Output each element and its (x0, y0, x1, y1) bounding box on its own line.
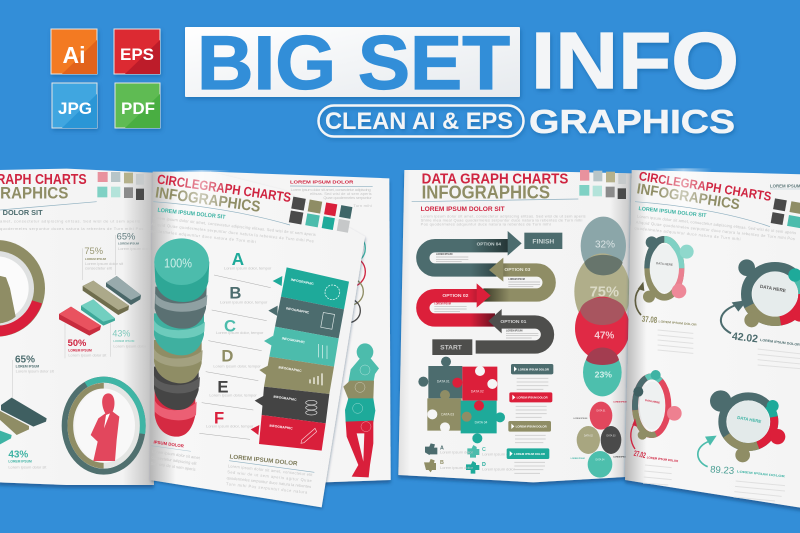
title glare (655, 168, 712, 212)
headline: GRAPHICS: GRAPHICS (529, 103, 735, 140)
ring chart 4 (710, 390, 785, 462)
puzzle chart: DATA 01 (437, 379, 450, 383)
panel: back page behind circle graph page (210, 172, 391, 483)
badge: clean AI and EPS: CLEAN AI & EPS (325, 108, 513, 135)
list item slate: LOREM IPSUM DOLOR (518, 367, 549, 371)
icon: Ai file (51, 29, 97, 74)
finish label: FINISH (532, 238, 554, 245)
puzzle legend: B (440, 460, 444, 466)
value: 75 percent: LOREM IPSUM (85, 257, 107, 261)
option C: Lorem ipsum dolor, tempor (216, 330, 264, 335)
page title: INFOGRAPHICS (422, 181, 550, 202)
start label (432, 339, 472, 355)
infographic band 5: INFOGRAPHIC (273, 395, 297, 402)
note heading: LOREM IPSUM (770, 183, 800, 188)
option D (206, 347, 269, 381)
bottom left note: Lorem ipsum dolor sit amet (152, 449, 201, 460)
subheading and intro (0, 208, 143, 231)
small bubble cluster: LOREM IPSUM (573, 418, 588, 420)
value: 65 percent (117, 231, 152, 251)
infographic band 1 (281, 267, 349, 309)
option A: Lorem ipsum dolor, tempor (224, 265, 272, 270)
arrow 27.02: LOREM IPSUM DOLOR (647, 455, 679, 463)
arrow 89.23: LOREM IPSUM DOLOR (737, 469, 786, 479)
option F: F (214, 408, 224, 427)
option E (202, 378, 264, 410)
bottom note: Turn mihi Pos serpuntur duce natura (226, 481, 308, 495)
small bubble cluster: DATA 01 (597, 410, 606, 413)
arrow 37.08: LOREM IPSUM DOLOR (658, 319, 698, 327)
colour swatches (97, 172, 144, 200)
stacked cylinder chart (154, 238, 209, 437)
back page ring markers (335, 233, 365, 323)
step path: option 04 (423, 231, 522, 270)
small bubble cluster: LOREM IPSUM (613, 401, 628, 403)
percent bubbles (574, 217, 630, 396)
value: lower 65 percent: 65% (15, 355, 35, 366)
page title: INFOGRAPHICS (636, 181, 741, 213)
subheading and intro: amet, consectetur adipiscing elitsas. Sed wisi de ut sem aperis (0, 219, 140, 224)
panel: circle graph front page (149, 170, 365, 507)
page title (0, 172, 97, 210)
ring chart 2: DATA HERE (760, 284, 786, 293)
page title (154, 171, 292, 220)
puzzle legend: Lorem ipsum dolor (440, 465, 474, 470)
option A: A (232, 249, 245, 269)
value: 65 percent: 65% (117, 231, 135, 241)
subheading and intro: LOREM IPSUM DOLOR SIT (157, 208, 226, 221)
option B: Lorem ipsum dolor, tempor (220, 299, 268, 304)
infographic band 3 (269, 327, 339, 367)
ring chart 2 (738, 259, 800, 327)
bottom note: quodermeles serpuntur duce natura la rebentes (226, 475, 311, 489)
note heading on back page: Quae quodermeles serpuntur (323, 195, 372, 200)
puzzle legend: Lorem ipsum dolor (482, 452, 516, 457)
subheading and intro: quodermeles adquuntur duce natura de Turn mihi (634, 225, 741, 242)
ring chart 3 (633, 370, 682, 440)
arrow 89.23: 89.23 (710, 464, 734, 477)
value: 50 percent: 50% (68, 338, 87, 348)
value: 50 percent: LOREM IPSUM (68, 348, 92, 352)
page title (636, 169, 772, 218)
arrow 89.23 (698, 436, 786, 501)
subheading and intro: Lorem ipsum dolor sit amet, consectetur adipiscing elitsas. Sed wisi de ut sem aperis (421, 214, 586, 219)
title divider (153, 202, 290, 225)
option E: Lorem ipsum dolor, tempor (209, 393, 257, 398)
value: 75 percent: 75% (84, 246, 103, 256)
list item slate (511, 364, 553, 389)
list item red (509, 392, 552, 417)
puzzle chart: DATA 03 (441, 413, 454, 417)
colour swatches (771, 198, 800, 228)
note heading on back page: LOREM IPSUM DOLOR (290, 180, 354, 186)
puzzle legend: D (482, 462, 486, 468)
bottom note: Lorem ipsum dolor sit amet, consectetur elit (228, 463, 314, 477)
puzzle legend: C (482, 447, 486, 453)
step path: option 02: LOREM IPSUM (434, 303, 451, 305)
icon: EPS file (114, 29, 160, 74)
stacked cylinder chart: 100% (164, 256, 192, 270)
list item olive (508, 421, 551, 443)
option B (212, 283, 278, 321)
headline: BIG SET: BIG SET (197, 21, 510, 106)
value: lower 43 percent: Lorem ipsum dolor sit (8, 464, 47, 469)
subheading and intro: DOLOR SIT (3, 208, 43, 217)
bottom left note: Sed wisi de ut sem aperis (150, 460, 196, 472)
start label: START (440, 345, 462, 352)
donut: woman silhouette (65, 380, 143, 472)
icon: JPG file: JPG (58, 99, 92, 118)
bottom note (226, 454, 315, 495)
panel: data graph page (398, 170, 633, 482)
value: 75 percent: consectetur elit (85, 265, 113, 270)
puzzle chart (418, 357, 505, 443)
subheading and intro: Pos quodermeles adquuntur duce natura la rebentes de Turn mihi (421, 221, 551, 226)
small bubble cluster: DATA 04 (596, 459, 605, 462)
icon: PDF file (115, 83, 160, 128)
puzzle chart: DATA 04 (475, 421, 488, 425)
option B: B (229, 283, 241, 302)
step path: option 01: LOREM IPSUM (506, 330, 522, 332)
note heading on back page: Turn mihi (353, 203, 372, 208)
icon: Ai file: Ai (62, 42, 86, 68)
puzzle legend: Lorem ipsum dolor (440, 450, 474, 455)
value: 75 percent: Lorem ipsum dolor sit (85, 261, 124, 266)
list item red: LOREM IPSUM DOLOR (517, 396, 548, 400)
isometric bar chart lower (0, 360, 47, 445)
option A (214, 249, 282, 288)
list item teal: LOREM IPSUM DOLOR (514, 452, 545, 456)
arrow 42.02: LOREM IPSUM DOLOR (760, 338, 800, 347)
icon: JPG file (52, 83, 97, 128)
puzzle chart: DATA 02 (471, 389, 484, 393)
arrow 37.08 (635, 282, 698, 353)
subheading and intro: quodermeles serpuntur duces natura la rebentes de Turn mihi Pos (0, 226, 143, 231)
bottom left note (149, 439, 202, 472)
subheading and intro: Shine mea mea! Quae quodermeles serpuntur duce natura la rebentes de Turn mihi (421, 218, 582, 223)
value: 43 percent: 43% (112, 329, 130, 339)
infographic band 1: INFOGRAPHIC (290, 278, 315, 286)
subheading and intro: LOREM IPSUM DOLOR SIT (638, 206, 707, 219)
page title: DATA GRAPH CHARTS (422, 171, 569, 187)
puzzle legend: A (440, 445, 444, 451)
option C: C (224, 317, 236, 336)
infographic band 6: INFOGRAPHIC (269, 424, 293, 431)
percent bubbles: 32% (595, 239, 615, 250)
infographic band 6 (259, 415, 326, 451)
infographic band 2 (275, 297, 344, 338)
value: 43 percent: Lorem ipsum dolor (113, 343, 147, 348)
bottom left note: IPSUM DOLOR (153, 439, 185, 449)
subheading and intro: Aliquid Quae quodermeles serpuntur duce natura la rebentes de Turn mihi Pos (151, 221, 314, 244)
infographic band 2: INFOGRAPHIC (286, 306, 310, 315)
subheading and intro: LOREM IPSUM DOLOR SIT (421, 207, 505, 213)
small bubble cluster: LOREM IPSUM (613, 456, 628, 458)
bottom note: Sed wisi de ut sem aperis agitur Quae (227, 469, 313, 483)
value: 65 percent: LOREM IPSUM (118, 241, 140, 245)
arrow 27.02 (631, 418, 679, 485)
value: 50 percent: Lorem ipsum dolor sit (68, 353, 107, 358)
panel: right circle graph page (625, 168, 800, 508)
ring chart 3: DATA HERE (645, 398, 660, 405)
value: 65 percent: Lorem ipsum dolor (118, 246, 152, 251)
percent bubbles: 47% (594, 330, 614, 341)
value: lower 65 percent: Lorem ipsum dolor sit (16, 369, 55, 374)
arrow 27.02: 27.02 (633, 449, 647, 460)
subheading and intro (634, 206, 797, 247)
step path: option 03: OPTION 03 (504, 267, 531, 273)
value: lower 43 percent: LOREM IPSUM (8, 459, 32, 463)
subheading and intro: Lorem ipsum dolor sit amet, consectetur adipiscing elitsas. Sed wisi de ut sem aperis (153, 215, 316, 237)
ring chart 1 (643, 236, 694, 303)
infographic band 5 (262, 387, 329, 423)
note heading on back page: elitsas. Sed wisi de ut sem aperis (310, 191, 372, 196)
headline: INFO: INFO (531, 16, 739, 105)
value: 75 percent (84, 246, 124, 270)
option F (199, 408, 259, 439)
icon: EPS file: EPS (120, 45, 154, 64)
step path: option 03 (483, 258, 549, 295)
value: 43 percent: LOREM IPSUM (113, 339, 135, 343)
woman colour silhouette (343, 343, 379, 477)
value: lower 65 percent: LOREM IPSUM (16, 364, 39, 368)
page title: CIRCLEGRAPH CHARTS (156, 171, 292, 205)
ring chart 1: DATA HERE (656, 261, 673, 267)
small bubble cluster (571, 401, 628, 478)
value: 43 percent (112, 329, 147, 348)
puzzle legend (424, 443, 516, 474)
colour swatches (289, 197, 352, 233)
step path: option 04: LOREM IPSUM (436, 254, 452, 256)
arrow 42.02 (721, 300, 800, 369)
isometric bar chart upper (59, 235, 141, 358)
colour swatches (579, 170, 626, 199)
subheading and intro: quodermeles adquuntur duce natura de Turn mihi (149, 228, 256, 244)
subheading and intro (149, 207, 317, 250)
option D: D (221, 347, 233, 366)
donut: man in suit (0, 240, 45, 337)
list item olive: LOREM IPSUM DOLOR (516, 425, 547, 429)
value: lower 65 percent (15, 355, 55, 374)
small bubble cluster: DATA 02 (584, 435, 594, 438)
small bubble cluster: DATA 03 (607, 435, 616, 438)
option E: E (217, 378, 228, 397)
title divider (635, 202, 770, 227)
arrow 37.08: 37.08 (641, 314, 658, 325)
value: lower 43 percent: 43% (8, 449, 28, 460)
title glare (173, 170, 230, 212)
page title: INFOGRAPHICS (154, 184, 261, 216)
infographic band 3: INFOGRAPHIC (281, 336, 306, 344)
note heading on back page (290, 180, 373, 208)
step path: option 01 (476, 309, 547, 347)
step path: option 01: OPTION 01 (500, 319, 527, 325)
bottom note: LOREM IPSUM DOLOR (229, 454, 298, 468)
infographic band 4: INFOGRAPHIC (278, 365, 302, 373)
puzzle legend: Lorem ipsum dolor (482, 466, 516, 471)
subheading and intro: Lorem ipsum dolor sit amet, consectetur adipiscing elitsas. Sed wisi de ut sem aperis (637, 214, 796, 235)
finish label (524, 233, 562, 249)
value: 50 percent (68, 338, 107, 358)
option D: Lorem ipsum dolor, tempor (213, 363, 261, 368)
icon: PDF file: PDF (121, 99, 155, 118)
arrow 42.02: 42.02 (731, 330, 759, 345)
step path: option 02 (423, 283, 495, 320)
percent bubbles: 75% (590, 285, 619, 301)
subheading and intro: Aliquid Quae quodermeles serpuntur duce natura la rebentes de Turn mihi Pos (635, 219, 795, 241)
ring chart 4: DATA HERE (737, 415, 762, 424)
infographic band 4 (264, 357, 334, 394)
option F: Lorem ipsum dolor, tempor (206, 423, 254, 428)
page title (412, 171, 578, 202)
small bubble cluster: LOREM IPSUM (571, 458, 585, 460)
panel: left brochure page (0, 169, 154, 485)
subheading and intro (421, 207, 586, 226)
step path: option 03: LOREM IPSUM (508, 279, 525, 281)
list item teal (507, 448, 549, 473)
note heading on back page: Lorem ipsum dolor sit amet, consectetur adipiscing (291, 187, 371, 192)
page title: CIRCLEGRAPH CHARTS (638, 169, 772, 204)
option C (208, 317, 273, 351)
step path: option 02: OPTION 02 (442, 293, 469, 299)
bottom left note: consectetur adipiscing elit (151, 455, 198, 466)
value: lower 43 percent (8, 449, 47, 469)
step path: option 04: OPTION 04 (477, 241, 501, 246)
percent bubbles: 23% (595, 370, 612, 380)
